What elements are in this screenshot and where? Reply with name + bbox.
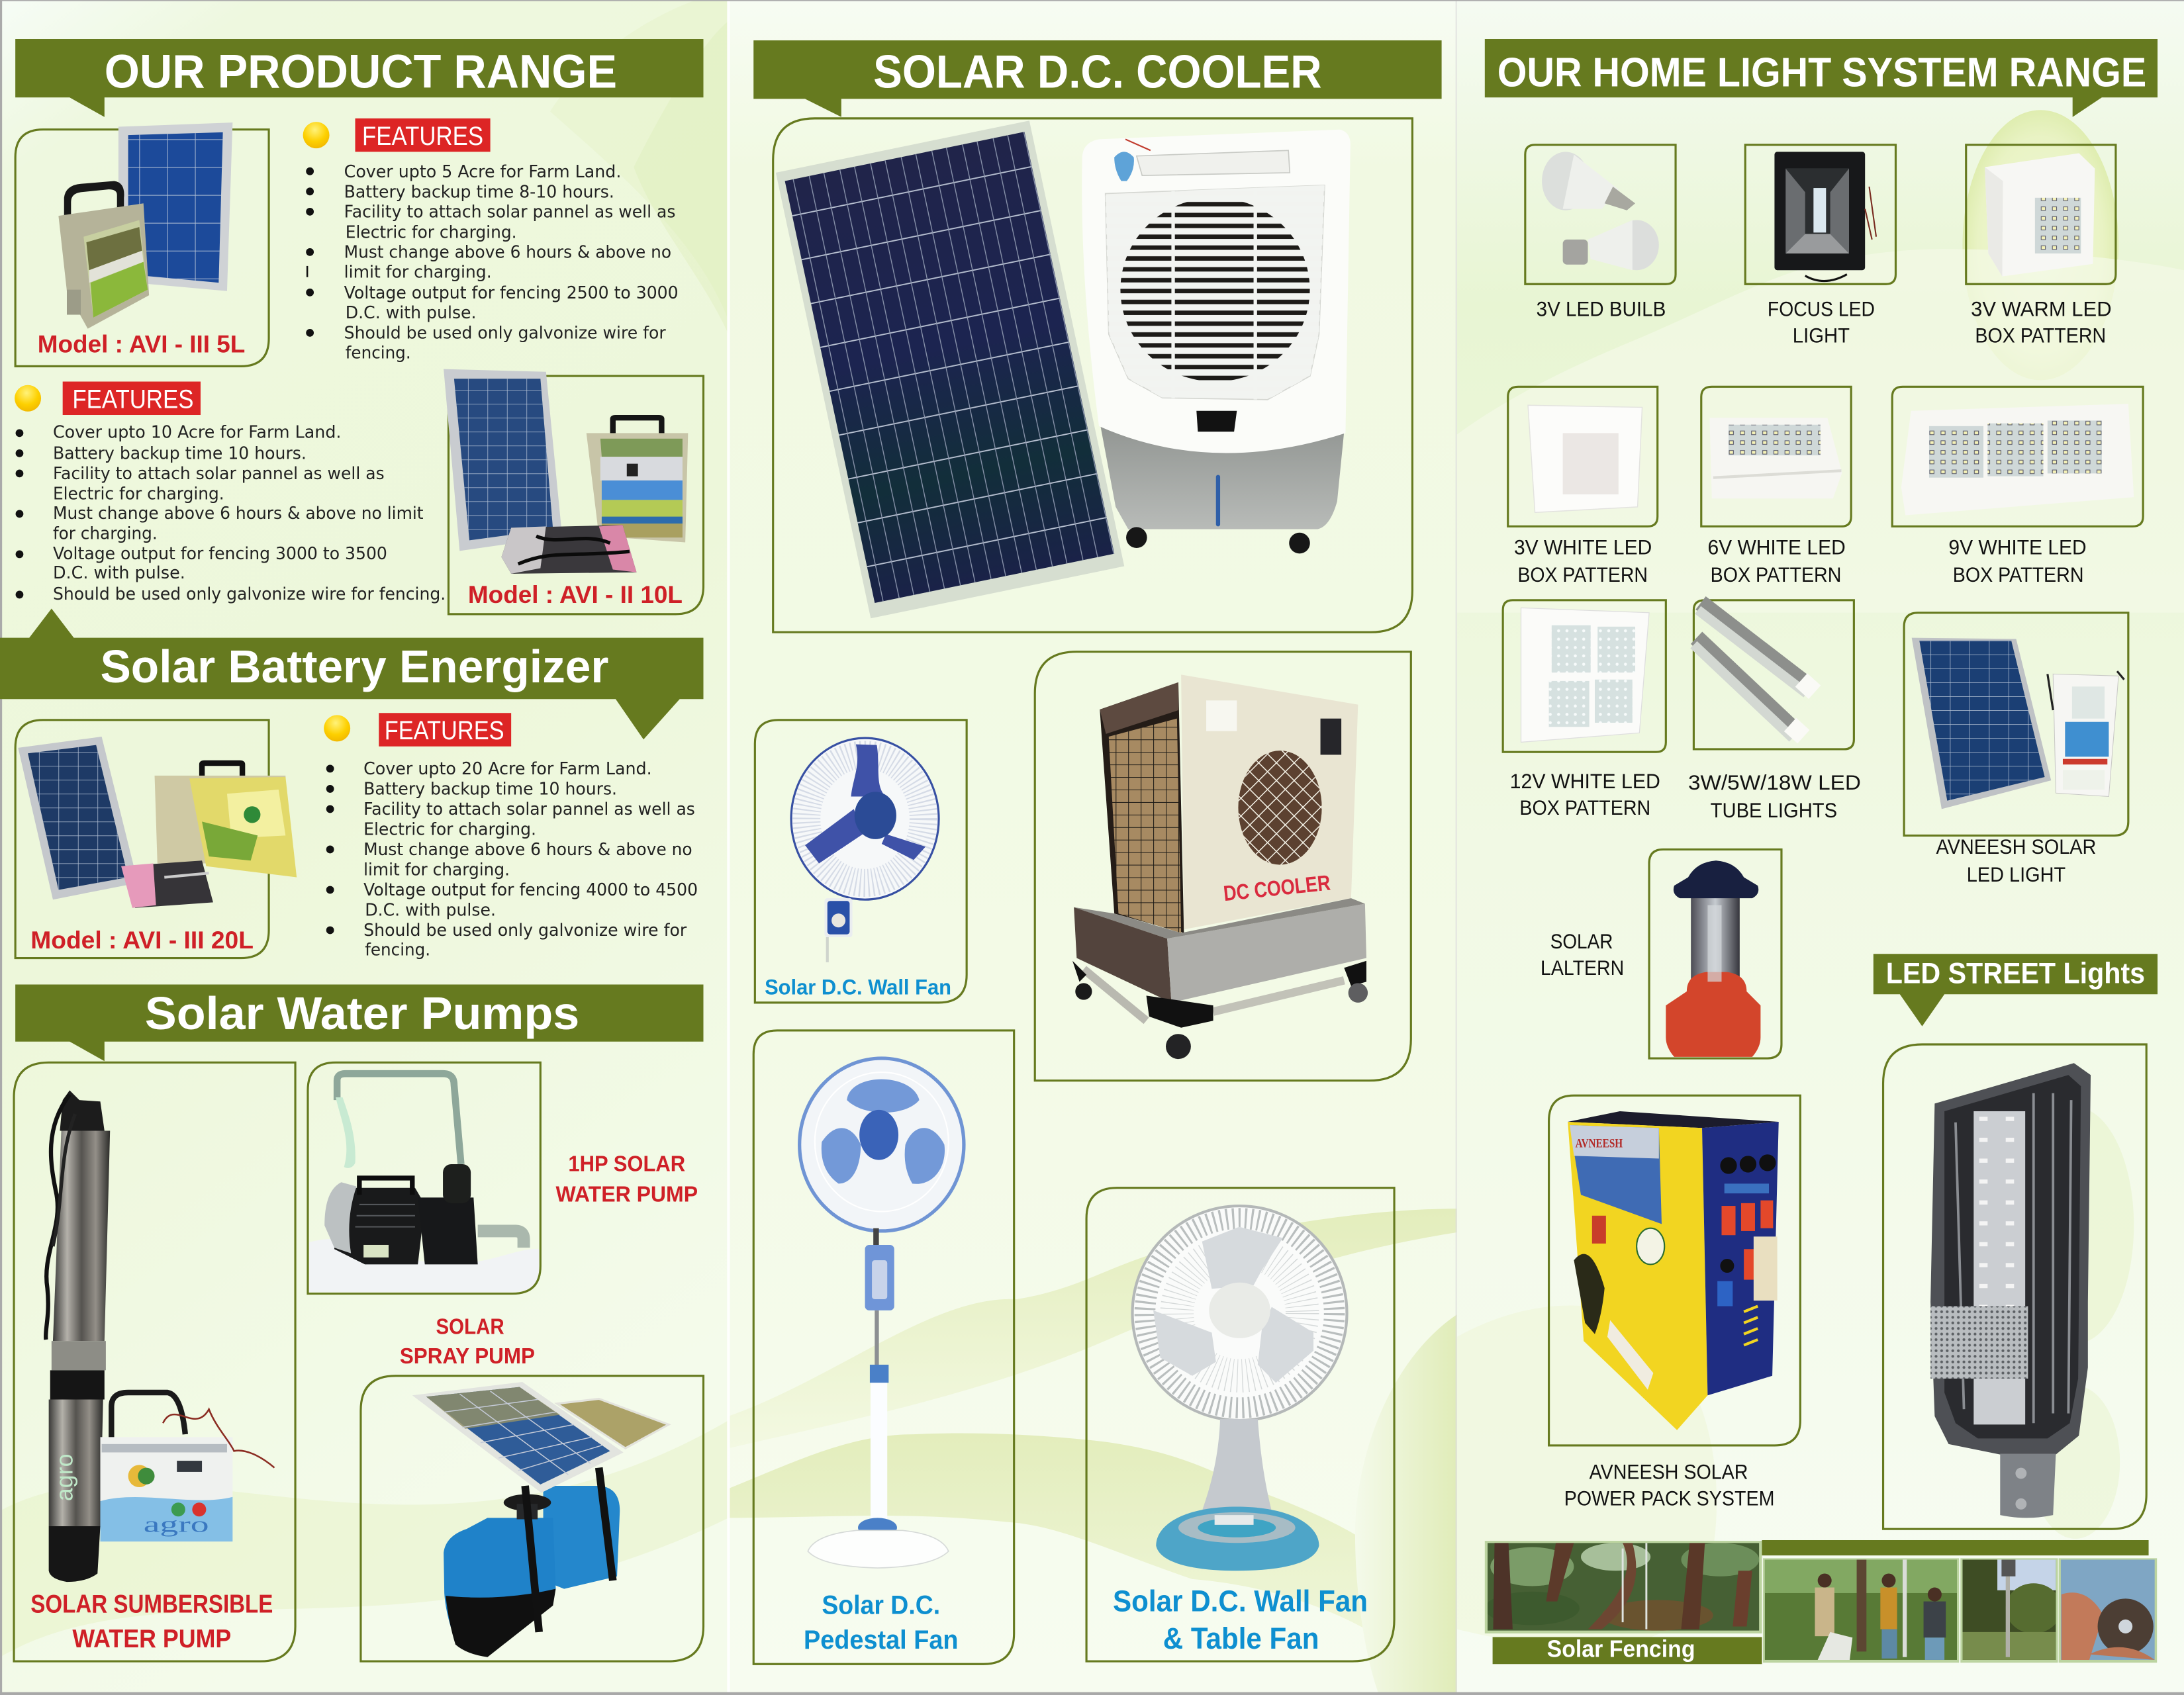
- features list: 20 acre: Battery backup time 10 hours.: [363, 779, 617, 799]
- features list: 10 acre: Electric for charging.: [53, 484, 224, 504]
- product: 3V warm LED box: BOX PATTERN: [1975, 324, 2106, 347]
- product card: table fan: [1086, 1188, 1394, 1661]
- photo: insulator in hand: [2059, 1558, 2157, 1663]
- heading: solar dc cooler: [753, 40, 1442, 117]
- panel: left column, product range: [0, 39, 703, 1661]
- heading: solar battery energizer: [0, 608, 703, 739]
- label: Solar D.C. Wall Fan: [765, 974, 951, 999]
- features list: 5 acre: FEATURES: [362, 122, 483, 151]
- product card: pedestal fan: Pedestal Fan: [804, 1626, 959, 1655]
- icon: power pack box: [1568, 1111, 1779, 1430]
- icon: street lamp: [1930, 1063, 2091, 1518]
- product card: AVI-III 5L: [15, 122, 269, 366]
- product: tube lights: [1688, 600, 1861, 822]
- heading: solar water pumps: Solar Water Pumps: [145, 987, 579, 1039]
- submersible pump image: agro: [51, 1454, 77, 1501]
- solar pump controller image: agro: [144, 1512, 209, 1537]
- features list: 20 acre: fencing.: [365, 940, 430, 960]
- heading: our product range: [15, 39, 703, 117]
- features list: 5 acre: fencing.: [346, 343, 411, 363]
- product: focus LED light: LIGHT: [1793, 324, 1850, 347]
- features list: 10 acre: Battery backup time 10 hours.: [53, 443, 307, 463]
- features list: 5 acre: Voltage output for fencing 2500 to 3000: [344, 283, 679, 303]
- features list: 10 acre: [15, 382, 446, 604]
- features list: 5 acre: D.C. with pulse.: [346, 303, 477, 323]
- accessories bag image: [121, 860, 213, 908]
- product: 9V white LED box: [1892, 387, 2143, 586]
- label: AVNEESH SOLAR: [1936, 835, 2096, 858]
- product: 3V LED bulb: [1525, 145, 1676, 321]
- features list: 20 acre: Facility to attach solar pannel as well as: [363, 800, 695, 819]
- features list: 20 acre: Must change above 6 hours & above no: [363, 840, 692, 860]
- solar panel image: [119, 122, 232, 291]
- features list: 5 acre: Must change above 6 hours & above no: [344, 243, 671, 263]
- energizer box image: [587, 415, 688, 543]
- pedestal fan image: [800, 1058, 964, 1568]
- panel: middle column, DC coolers and fans: [753, 40, 1442, 1664]
- product card: AVI-II 10L: [444, 369, 703, 614]
- label: 3V WHITE LED: [1514, 535, 1652, 559]
- product: Avneesh solar LED light: [1904, 613, 2128, 886]
- label: 9V WHITE LED: [1948, 535, 2087, 559]
- product card: table fan: & Table Fan: [1163, 1622, 1319, 1655]
- label: 1hp solar water pump: 1HP SOLAR: [568, 1152, 685, 1176]
- heading: LED street lights: LED STREET Lights: [1886, 957, 2145, 989]
- label: solar spray pump: SPRAY PUMP: [400, 1344, 535, 1369]
- features list: 10 acre: D.C. with pulse.: [53, 563, 185, 583]
- product: solar power pack: POWER PACK SYSTEM: [1564, 1486, 1774, 1510]
- label: Solar D.C.: [822, 1591, 940, 1620]
- icon: power pack box: AVNEESH: [1576, 1137, 1623, 1151]
- features list: 10 acre: Cover upto 10 Acre for Farm Land.: [53, 423, 341, 443]
- solar panel image: [18, 737, 138, 899]
- heading: solar water pumps: [15, 985, 703, 1061]
- DC cooler image: [1072, 674, 1368, 1059]
- features list: 20 acre: FEATURES: [385, 716, 504, 745]
- heading: LED street lights: [1874, 954, 2158, 1027]
- label: AVNEESH SOLAR: [1590, 1459, 1748, 1483]
- heading: our product range: OUR PRODUCT RANGE: [105, 46, 617, 99]
- product: 6V white LED box: BOX PATTERN: [1711, 563, 1841, 586]
- accessories bag image: [501, 525, 637, 574]
- air cooler image: [1082, 130, 1351, 553]
- features list: 20 acre: limit for charging.: [363, 860, 510, 880]
- product: solar power pack: [1549, 1095, 1800, 1510]
- product card: 1HP water pump: [308, 1062, 540, 1294]
- features list: 10 acre: Should be used only galvonize wire for fencing.: [53, 584, 446, 604]
- label: solar spray pump: [400, 1315, 535, 1369]
- label: 12V WHITE LED: [1510, 769, 1660, 793]
- features list: 20 acre: Should be used only galvonize wire for: [363, 921, 687, 940]
- features list: 20 acre: Electric for charging.: [363, 819, 536, 839]
- icon: warm LED box: [1985, 153, 2095, 277]
- product: 3V white LED box: [1508, 387, 1658, 586]
- photo: forest fence: [1485, 1541, 1762, 1633]
- product card: pedestal fan: [753, 1031, 1014, 1664]
- solar fencing strip: [1485, 1540, 2157, 1664]
- label: solar lantern: [1541, 929, 1624, 980]
- icon: LED bulbs: [1542, 152, 1659, 270]
- features list: 20 acre: Cover upto 20 Acre for Farm Land.: [363, 759, 652, 779]
- features list: 10 acre: Must change above 6 hours & above no limit: [53, 504, 424, 524]
- icon: LED tubes: [1693, 603, 1821, 743]
- heading: solar battery energizer: Solar Battery Energizer: [100, 641, 608, 692]
- label: 1hp solar water pump: [555, 1152, 698, 1207]
- features list: 5 acre: Cover upto 5 Acre for Farm Land.: [344, 162, 621, 182]
- icon: solar panel and lamp: [1912, 638, 2124, 809]
- label: 6V WHITE LED: [1707, 535, 1846, 559]
- photo: workers at fence: [1763, 1558, 1959, 1663]
- product: 12V white LED box: BOX PATTERN: [1519, 796, 1650, 819]
- icon: 12V LED box: [1521, 608, 1649, 742]
- DC cooler image: DC COOLER: [1222, 870, 1331, 905]
- label: solar spray pump: SOLAR: [436, 1315, 504, 1340]
- features list: 5 acre: limit for charging.: [344, 263, 492, 283]
- features list: 5 acre: Electric for charging.: [346, 223, 517, 243]
- label: 3V WARM LED: [1971, 297, 2112, 321]
- icon: lantern: [1666, 860, 1760, 1057]
- features list: 10 acre: FEATURES: [72, 385, 193, 414]
- label: solar lantern: SOLAR: [1550, 929, 1613, 953]
- label: solar lantern: LALTERN: [1541, 956, 1624, 980]
- product card: wall fan: [755, 720, 967, 1003]
- features list: 20 acre: Voltage output for fencing 4000 to 4500: [363, 880, 698, 900]
- spray pump image: [412, 1382, 669, 1657]
- features list: 10 acre: for charging.: [53, 524, 158, 543]
- product: 6V white LED box: [1701, 387, 1851, 586]
- solar panel image: [444, 369, 562, 551]
- product: focus LED light: [1745, 145, 1895, 347]
- icon: 6V LED box: [1709, 418, 1842, 498]
- icon: 9V LED box: [1901, 404, 2134, 515]
- wall fan image: [791, 738, 939, 962]
- features list: 5 acre: [303, 118, 679, 363]
- product: 3V warm LED box: [1966, 145, 2116, 347]
- label: 3V LED BUILB: [1537, 297, 1666, 321]
- model label: Model : AVI - III 5L: [38, 330, 245, 357]
- label: 1hp solar water pump: WATER PUMP: [555, 1183, 698, 1207]
- water pump image: [309, 1074, 539, 1293]
- product: tube lights: TUBE LIGHTS: [1711, 798, 1837, 822]
- icon: white LED box: [1528, 405, 1642, 512]
- table fan image: [1133, 1206, 1347, 1571]
- solar pump controller image: [100, 1393, 274, 1541]
- model label: Model : AVI - III 20L: [30, 927, 254, 954]
- energizer box image: [58, 181, 149, 329]
- heading: our home light system range: OUR HOME LIGHT SYSTEM RANGE: [1497, 50, 2146, 95]
- product card: submersible pump: WATER PUMP: [72, 1625, 231, 1653]
- energizer box image: [155, 760, 297, 878]
- heading: solar dc cooler: SOLAR D.C. COOLER: [873, 46, 1322, 98]
- features list: 20 acre: D.C. with pulse.: [365, 900, 496, 920]
- product: 9V white LED box: BOX PATTERN: [1953, 563, 2084, 586]
- label: SOLAR SUMBERSIBLE: [30, 1590, 273, 1618]
- product card: AVI-III 20L: [15, 720, 297, 958]
- product card: solar cooler: [773, 118, 1412, 632]
- label: Solar Fencing: [1547, 1636, 1695, 1663]
- features list: 20 acre: [324, 713, 698, 960]
- product: 12V white LED box: [1503, 600, 1666, 819]
- product: solar lantern: [1649, 849, 1781, 1058]
- features list: 5 acre: Facility to attach solar pannel as well as: [344, 202, 675, 222]
- submersible pump image: [46, 1090, 110, 1582]
- heading: our home light system range: [1485, 39, 2158, 117]
- product: 3V white LED box: BOX PATTERN: [1517, 563, 1648, 586]
- features list: 10 acre: Facility to attach solar pannel as well as: [53, 464, 385, 484]
- product card: DC cooler: [1035, 652, 1411, 1081]
- features list: 5 acre: Battery backup time 8-10 hours.: [344, 182, 614, 202]
- panel: right column, home lights: [1485, 39, 2158, 1664]
- large solar panel image: [776, 120, 1124, 618]
- features list: 5 acre: Should be used only galvonize wire for: [344, 324, 666, 344]
- product: street light: [1883, 1044, 2146, 1529]
- features list: 10 acre: Voltage output for fencing 3000 to 3500: [53, 544, 387, 564]
- icon: flood light: [1774, 152, 1876, 281]
- label: 3W/5W/18W LED: [1688, 770, 1861, 794]
- product card: spray pump: [361, 1376, 703, 1661]
- product: Avneesh solar LED light: LED LIGHT: [1967, 862, 2065, 886]
- label: Solar D.C. Wall Fan: [1113, 1584, 1368, 1618]
- product card: submersible pump: [14, 1062, 295, 1661]
- model label: Model : AVI - II 10L: [468, 581, 683, 608]
- photo: solar pole: [1960, 1558, 2062, 1663]
- label: FOCUS LED: [1768, 297, 1875, 321]
